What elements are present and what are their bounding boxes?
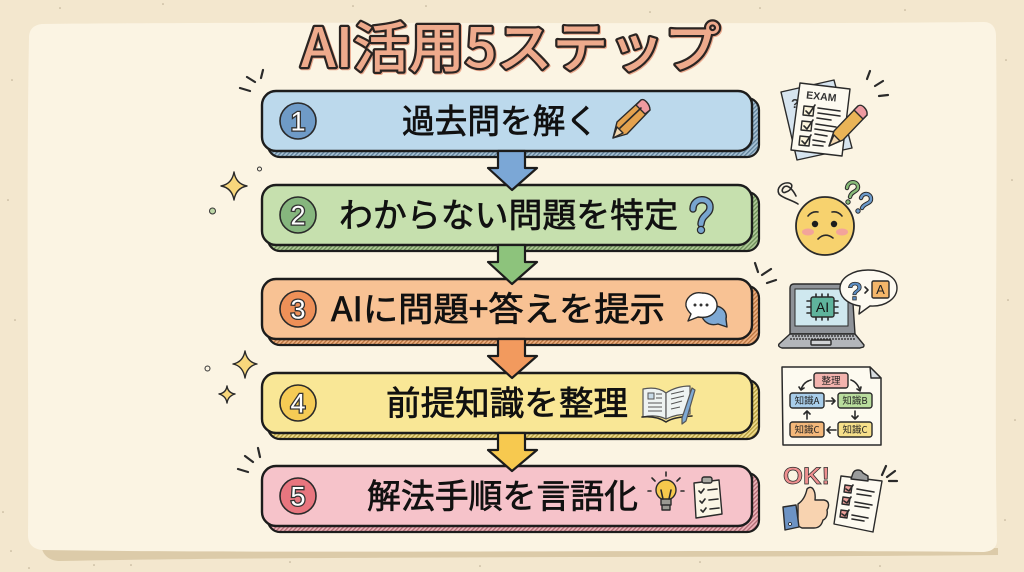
step 5: 解法手順を言語化 bbox=[262, 466, 759, 532]
step 1: 過去問を解く bbox=[262, 91, 759, 157]
arrow: step 3 to 4 bbox=[488, 339, 537, 378]
icon: small checklist bbox=[694, 477, 722, 518]
icon: light bulb bbox=[648, 472, 684, 510]
paper panel shadow bbox=[42, 548, 998, 561]
step 5 number badge: 5 bbox=[290, 482, 306, 512]
step 2: わからない問題を特定 bbox=[262, 185, 759, 251]
icon: confused face bbox=[778, 182, 871, 255]
step 4 number badge bbox=[280, 385, 316, 421]
step 3 label: AIに問題+答えを提示 bbox=[331, 282, 665, 331]
decoration: burst lines laptop bbox=[755, 263, 776, 283]
knowledge node: 知識A: 知識A bbox=[795, 393, 820, 407]
step 5 label: 解法手順を言語化 bbox=[367, 469, 638, 518]
icon: exam papers and pencil: EXAM bbox=[806, 89, 837, 105]
step 4 number badge: 4 bbox=[290, 388, 306, 418]
knowledge map arrows bbox=[799, 380, 861, 433]
step 2 number badge: 2 bbox=[290, 200, 306, 230]
arrow: step 4 to 5 bbox=[488, 433, 537, 471]
decoration: burst lines step 1 bbox=[240, 70, 263, 91]
step 2 number badge bbox=[280, 197, 316, 233]
decoration: sparkle and dots upper left bbox=[210, 167, 262, 214]
icon: chat bubbles bbox=[686, 293, 727, 327]
step 1 number badge bbox=[280, 103, 316, 139]
icon: knowledge map document bbox=[782, 367, 881, 445]
icon: laptop with AI chip: AI bbox=[816, 299, 829, 315]
icon: exam papers and pencil: ? bbox=[791, 96, 799, 111]
step 4 label: 前提知識を整理 bbox=[386, 376, 628, 425]
arrow: step 1 to 2 bbox=[488, 151, 537, 190]
knowledge node: 知識B: 知識B bbox=[842, 393, 868, 407]
arrow: step 2 to 3 bbox=[488, 245, 537, 284]
speech bubble with question and answer: ? bbox=[847, 278, 863, 306]
icon: open book and pen bbox=[642, 386, 695, 424]
step 4: 前提知識を整理 bbox=[262, 373, 759, 439]
speech bubble with question and answer bbox=[840, 270, 897, 314]
knowledge node: 知識C right: 知識C bbox=[842, 422, 868, 436]
icon: pencil bbox=[613, 100, 650, 138]
speech bubble with question and answer: A bbox=[876, 282, 885, 297]
step 3: AIに問題+答えを提示 bbox=[262, 279, 759, 345]
burst lines near exam bbox=[867, 71, 888, 96]
icon: question mark bbox=[693, 200, 710, 234]
icon: exam papers and pencil bbox=[781, 71, 888, 160]
step 5 number badge bbox=[280, 478, 316, 514]
step 3 number badge: 3 bbox=[290, 294, 306, 324]
icon: OK text: OK! bbox=[783, 463, 830, 490]
icon: laptop with AI chip bbox=[779, 270, 897, 348]
decoration: burst lines step 5 bbox=[238, 448, 260, 472]
decoration: sparkles mid left bbox=[205, 351, 257, 403]
step 3 number badge bbox=[280, 291, 316, 327]
confusion scribble bbox=[778, 183, 798, 204]
icon: thumbs up bbox=[783, 487, 829, 530]
step 2 label: わからない問題を特定 bbox=[339, 188, 678, 237]
knowledge node: 整理: 整理 bbox=[821, 373, 841, 387]
title: AI活用5ステップ bbox=[301, 4, 720, 83]
burst lines near clipboard bbox=[882, 466, 897, 481]
step 1 label: 過去問を解く bbox=[402, 94, 598, 143]
step 1 number badge: 1 bbox=[290, 106, 306, 136]
knowledge node: 知識C left: 知識C bbox=[794, 422, 820, 436]
icon: clipboard checklist bbox=[834, 466, 897, 532]
